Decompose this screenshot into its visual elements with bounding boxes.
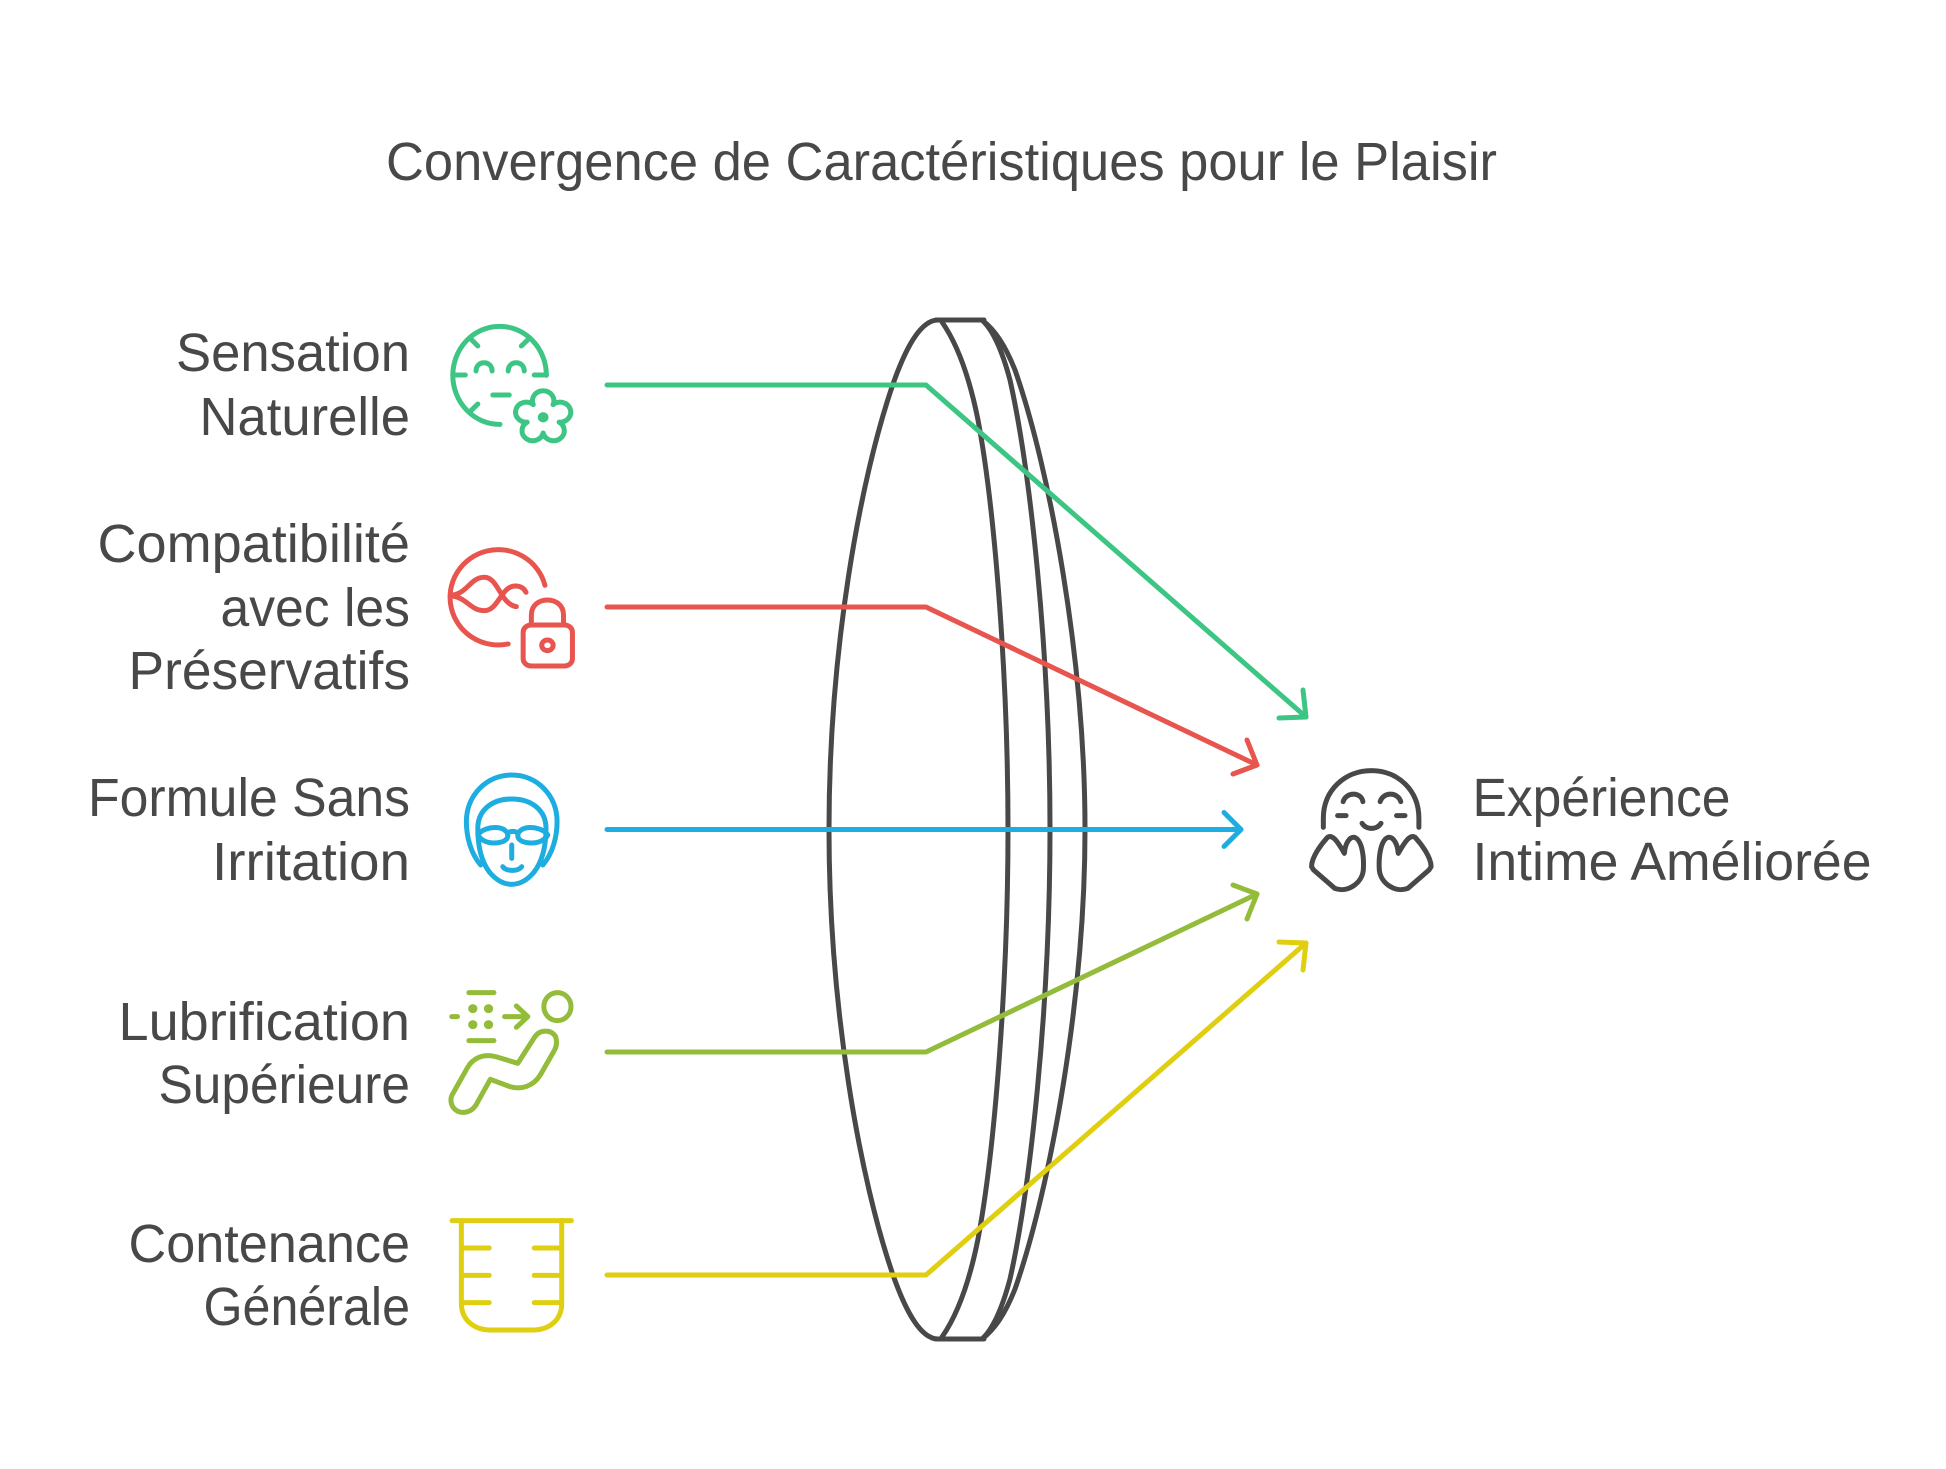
lens	[829, 320, 1085, 1339]
arrow: lime	[607, 885, 1257, 1052]
arrow: yellow	[607, 942, 1306, 1275]
label: Formule Sans Irritation: Formule Sans	[88, 768, 410, 828]
label: Formule Sans Irritation	[88, 768, 410, 892]
label: Contenance Générale	[128, 1214, 410, 1337]
label: Contenance Générale: Générale	[204, 1277, 410, 1337]
label: Compatibilité avec les Préservatifs: avec les	[220, 578, 410, 638]
label: Compatibilité avec les Préservatifs: Compatibilité	[98, 514, 410, 574]
label: Sensation Naturelle: Naturelle	[200, 387, 410, 447]
label: Expérience Intime Améliorée: Expérience	[1472, 768, 1730, 828]
arrow: blue	[607, 812, 1241, 846]
label: Compatibilité avec les Préservatifs: Préservatifs	[128, 641, 410, 701]
arrow: red	[607, 607, 1257, 774]
label: Expérience Intime Améliorée	[1472, 768, 1872, 892]
icon: wave with padlock	[450, 550, 572, 666]
label: Contenance Générale: Contenance	[128, 1214, 410, 1274]
label: Formule Sans Irritation: Irritation	[212, 832, 410, 892]
label: Lubrification Supérieure: Supérieure	[158, 1055, 410, 1115]
icon: lubrication flow	[451, 993, 571, 1112]
label: Expérience Intime Améliorée: Intime Améliorée	[1472, 832, 1872, 892]
label: Lubrification Supérieure: Lubrification	[118, 992, 410, 1052]
icon: face with goggles	[466, 775, 557, 884]
icon: face with flower	[453, 326, 571, 441]
label: Lubrification Supérieure	[118, 992, 410, 1115]
icon: happy face with hands	[1312, 771, 1431, 890]
icon: measuring beaker	[452, 1221, 571, 1330]
label: Sensation Naturelle: Sensation	[176, 323, 410, 383]
label: Compatibilité avec les Préservatifs	[98, 514, 410, 701]
arrow: green	[607, 385, 1306, 718]
label: Sensation Naturelle	[176, 323, 410, 447]
title: Convergence de Caractéristiques pour le Plaisir	[386, 132, 1497, 192]
